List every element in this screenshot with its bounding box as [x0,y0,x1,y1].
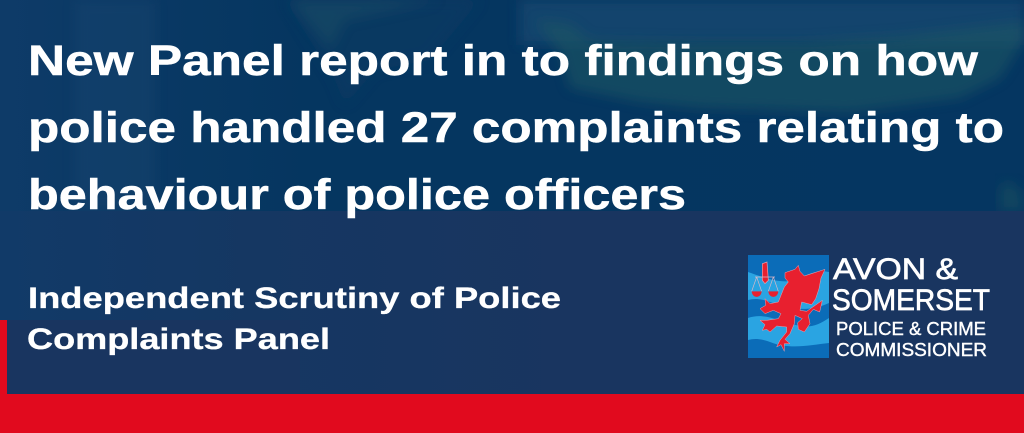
logo wordmark: SOMERSET [832,284,990,317]
logo: Avon & Somerset Police & Crime Commissioner [748,253,990,360]
logo wordmark: POLICE & CRIME [836,318,986,339]
main heading: police handled 27 complaints relating to [28,104,1004,152]
icon: scales of justice [752,262,778,297]
main heading [28,37,1004,219]
subheading: Independent Scrutiny of Police [28,282,561,315]
navy band under subheading [0,320,300,394]
icon: red dragon [760,265,825,351]
navy lower panel [0,211,1024,394]
logo wordmark: AVON & [833,253,958,286]
background: blurred photo overlay [0,0,1024,211]
main heading: behaviour of police officers [28,171,686,219]
red corner band [0,320,1024,433]
main heading: New Panel report in to findings on how [28,37,979,85]
logo wordmark [832,253,990,360]
logo wordmark: COMMISSIONER [836,339,987,360]
subheading [27,282,561,356]
subheading: Complaints Panel [27,323,330,356]
icon: crest with dragon and scales [748,255,829,358]
